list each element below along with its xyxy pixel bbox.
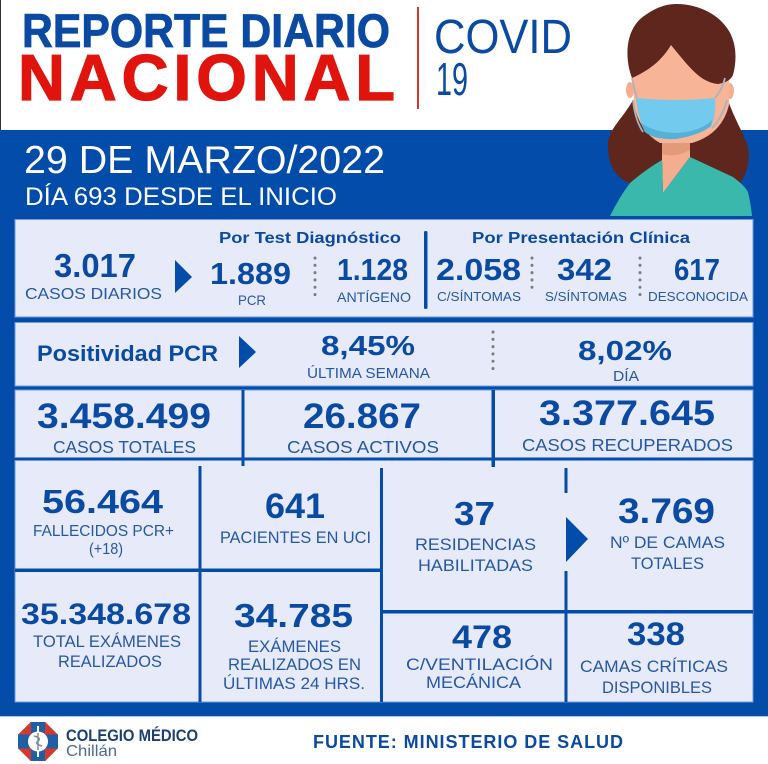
residences: RESIDENCIAS: [415, 535, 536, 554]
last week positivity: 8,45%: [321, 330, 415, 361]
mechanical ventilation: [406, 619, 553, 692]
panel: PCR positivity: [15, 322, 753, 386]
antigen count: ANTÍGENO: [337, 289, 411, 305]
arrow: [566, 517, 588, 562]
panel: totals row: [15, 390, 753, 458]
header title: REPORTE DIARIO: [22, 4, 390, 57]
unknown count: [648, 252, 748, 304]
source note: FUENTE: MINISTERIO DE SALUD: [313, 732, 623, 752]
heading: por presentacion clinica: Por Presentación Clínica: [472, 230, 690, 247]
PCR count: [210, 256, 291, 308]
exams last 24 hours: 34.785: [234, 597, 353, 634]
recovered cases: [522, 394, 733, 455]
exams last 24 hours: EXÁMENES: [248, 637, 341, 656]
total beds: TOTALES: [631, 554, 704, 573]
day positivity: DÍA: [613, 368, 639, 385]
header title: [18, 4, 395, 114]
date heading: 29 DE MARZO/2022: [24, 139, 385, 182]
ICU patients: PACIENTES EN UCI: [220, 529, 371, 547]
date heading: [24, 139, 385, 211]
arrow: [175, 260, 192, 293]
positivity heading: Positividad PCR: [37, 341, 218, 366]
last week positivity: [307, 330, 430, 382]
PCR count: PCR: [238, 292, 266, 308]
critical beds available: CAMAS CRÍTICAS: [580, 657, 728, 676]
mechanical ventilation: 478: [452, 619, 512, 655]
day positivity: [578, 335, 672, 385]
daily cases total: CASOS DIARIOS: [25, 286, 162, 303]
total beds: 3.769: [618, 492, 715, 531]
panel: daily cases: [15, 220, 753, 317]
unknown count: DESCONOCIDA: [648, 289, 748, 304]
icon: colegio medico logo: [18, 722, 58, 761]
residences: HABILITADAS: [418, 556, 533, 575]
critical beds available: 338: [627, 616, 685, 652]
antigen count: 1.128: [337, 252, 408, 287]
organization name: Chillán: [66, 743, 117, 760]
last week positivity: ÚLTIMA SEMANA: [307, 365, 430, 382]
active cases: [287, 397, 439, 457]
panel: lower grid: [15, 390, 753, 702]
deaths: 56.464: [42, 483, 164, 520]
recovered cases: 3.377.645: [539, 394, 715, 433]
exams last 24 hours: REALIZADOS EN: [228, 655, 361, 674]
ICU patients: [220, 487, 371, 547]
ICU patients: 641: [265, 487, 325, 526]
symptomatic count: [436, 252, 521, 304]
mechanical ventilation: MECÁNICA: [426, 673, 522, 692]
residences: 37: [454, 495, 495, 532]
icon: woman with face mask: [608, 4, 752, 216]
total exams: REALIZADOS: [58, 652, 162, 671]
total cases: [37, 397, 211, 457]
mechanical ventilation: C/VENTILACIÓN: [406, 655, 553, 674]
COVID 19 label: 19: [436, 53, 468, 105]
total beds: Nº DE CAMAS: [610, 533, 725, 552]
recovered cases: CASOS RECUPERADOS: [522, 435, 733, 455]
residences: [415, 495, 536, 575]
total exams: [21, 598, 191, 671]
blue background band: [0, 130, 768, 716]
deaths: [33, 483, 174, 558]
total exams: 35.348.678: [21, 598, 191, 631]
total cases: 3.458.499: [37, 397, 211, 436]
exams last 24 hours: [223, 597, 365, 693]
asymptomatic count: S/SÍNTOMAS: [545, 289, 627, 304]
arrow: [239, 336, 256, 368]
antigen count: [337, 252, 411, 305]
unknown count: 617: [674, 252, 720, 287]
critical beds available: DISPONIBLES: [602, 678, 712, 697]
active cases: CASOS ACTIVOS: [287, 437, 439, 457]
organization name: [66, 726, 198, 760]
daily cases total: 3.017: [54, 247, 136, 284]
exams last 24 hours: ÚLTIMAS 24 HRS.: [223, 674, 365, 693]
total cases: CASOS TOTALES: [53, 437, 196, 457]
symptomatic count: C/SÍNTOMAS: [437, 289, 521, 304]
organization name: COLEGIO MÉDICO: [66, 726, 198, 745]
daily cases total: [25, 247, 162, 303]
total beds: [610, 492, 725, 573]
PCR count: 1.889: [210, 256, 291, 291]
deaths: FALLECIDOS PCR+: [33, 523, 174, 540]
asymptomatic count: 342: [557, 252, 612, 287]
day positivity: 8,02%: [578, 335, 672, 366]
deaths: (+18): [89, 541, 123, 558]
COVID 19 label: [434, 11, 572, 105]
header title: NACIONAL: [18, 41, 395, 114]
heading: por test diagnostico: Por Test Diagnóstico: [219, 230, 401, 247]
active cases: 26.867: [303, 397, 421, 436]
asymptomatic count: [545, 252, 627, 304]
COVID 19 label: COVID: [434, 11, 572, 64]
date heading: DÍA 693 DESDE EL INICIO: [25, 182, 337, 211]
symptomatic count: 2.058: [436, 252, 521, 287]
critical beds available: [580, 616, 728, 697]
total exams: TOTAL EXÁMENES: [33, 632, 181, 651]
